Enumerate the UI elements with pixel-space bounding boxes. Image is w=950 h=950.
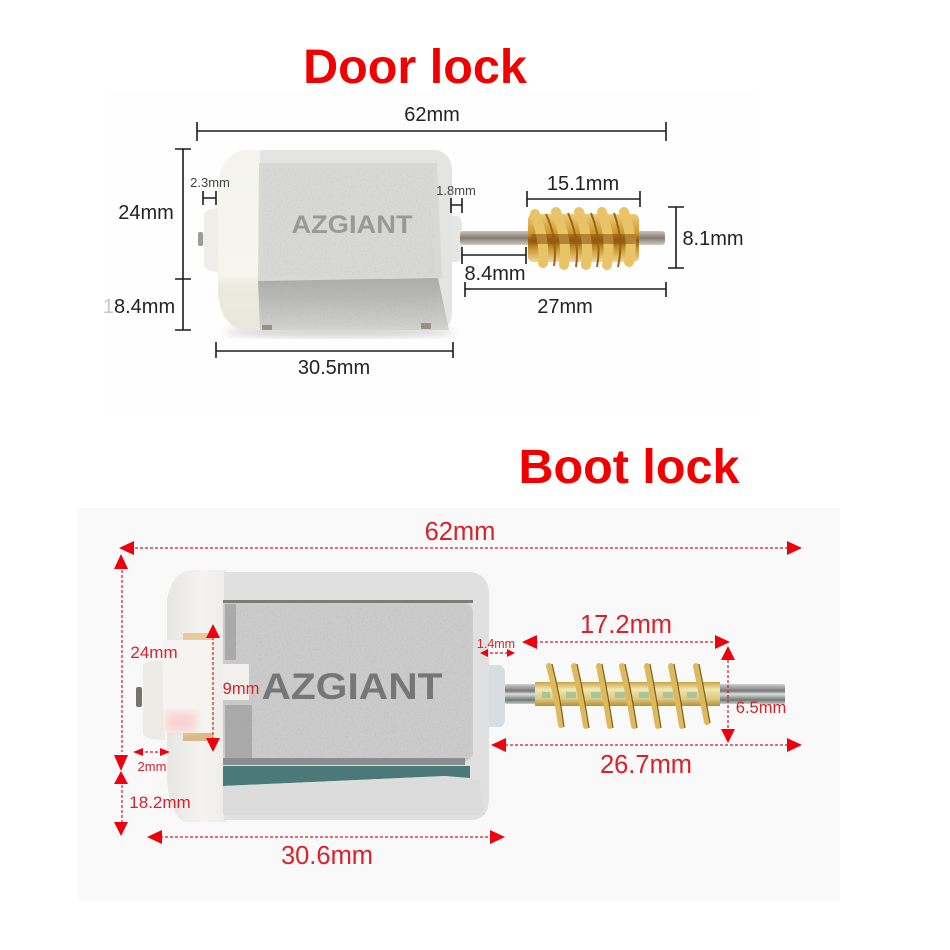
shadow bbox=[225, 327, 455, 337]
panel: boot lock photo background bbox=[78, 508, 840, 902]
door lock labels: 1.8mm bbox=[436, 183, 476, 198]
boot lock labels: 17.2mm bbox=[580, 611, 672, 639]
can inner face bbox=[223, 603, 473, 765]
8.1mm line bbox=[668, 207, 684, 268]
9mm line bbox=[212, 632, 214, 748]
27mm line bbox=[465, 282, 666, 297]
26.7mm line bbox=[500, 744, 790, 746]
door lock labels: 30.5mm bbox=[298, 357, 370, 379]
17.2mm line bbox=[530, 641, 722, 643]
boot lock labels: 6.5mm bbox=[736, 699, 786, 717]
white end cap bbox=[218, 150, 260, 330]
boot lock labels bbox=[129, 518, 786, 870]
62mm line bbox=[130, 547, 790, 549]
pin bbox=[136, 687, 142, 707]
boot lock labels: 2mm bbox=[138, 759, 166, 774]
30.5mm line bbox=[216, 342, 453, 358]
panel: door lock photo background bbox=[108, 90, 755, 415]
title: Boot lock: Boot lock bbox=[519, 440, 740, 494]
teal band bbox=[223, 766, 470, 786]
door lock labels: 15.1mm bbox=[547, 173, 619, 195]
24mm line bbox=[121, 565, 123, 752]
2mm line bbox=[140, 751, 165, 753]
door lock motor bbox=[198, 150, 665, 337]
shaft bbox=[460, 231, 665, 245]
metal can bbox=[260, 150, 452, 330]
door lock labels bbox=[103, 104, 744, 379]
boot lock labels: 1.4mm bbox=[477, 637, 515, 651]
metal can bbox=[224, 572, 489, 820]
brass worm gear bbox=[535, 664, 720, 728]
15.1mm line bbox=[527, 191, 640, 207]
8.4mm line bbox=[462, 247, 526, 264]
title: Door lock: Door lock bbox=[303, 40, 528, 94]
boot lock motor bbox=[136, 570, 785, 822]
white end cap bbox=[167, 570, 226, 822]
boot lock arrowheads bbox=[114, 541, 802, 844]
boot lock dimensions bbox=[122, 548, 790, 837]
AZGIANT watermark: AZGIANT bbox=[292, 211, 412, 239]
24mm / 18.4mm line bbox=[175, 149, 191, 330]
door lock labels: 27mm bbox=[537, 296, 593, 318]
boot lock labels: 30.6mm bbox=[281, 842, 373, 870]
62mm line bbox=[197, 122, 666, 141]
door lock labels: 18.4mm bbox=[103, 296, 175, 318]
boot lock labels: 62mm bbox=[425, 518, 495, 546]
18.2mm line bbox=[121, 775, 123, 825]
boot lock labels: 26.7mm bbox=[600, 751, 692, 779]
2.3mm mark bbox=[203, 191, 216, 205]
left boss bbox=[199, 208, 218, 272]
pin bbox=[198, 232, 203, 246]
right boss bbox=[489, 665, 505, 727]
6.5mm line bbox=[727, 655, 729, 735]
right boss bbox=[452, 216, 462, 262]
1.8mm mark bbox=[451, 198, 462, 213]
left boss bbox=[143, 660, 165, 740]
door lock dimensions bbox=[175, 122, 684, 358]
door lock labels: 8.4mm bbox=[464, 263, 526, 285]
door lock labels: 62mm bbox=[404, 104, 460, 126]
30.6mm line bbox=[155, 836, 495, 838]
door lock labels: 24mm bbox=[118, 202, 174, 224]
shaft bbox=[505, 684, 785, 704]
brass worm gear bbox=[528, 212, 639, 267]
boot lock labels: 18.2mm bbox=[129, 793, 191, 812]
AZGIANT watermark: AZGIANT bbox=[262, 666, 443, 707]
1.4mm line bbox=[485, 652, 510, 654]
door lock labels: 2.3mm bbox=[190, 175, 230, 190]
door lock labels: 8.1mm bbox=[682, 228, 744, 250]
boot lock labels: 9mm bbox=[223, 680, 259, 698]
can top face bbox=[258, 163, 442, 281]
can lower band bbox=[258, 278, 449, 330]
boot lock labels: 24mm bbox=[130, 643, 178, 662]
